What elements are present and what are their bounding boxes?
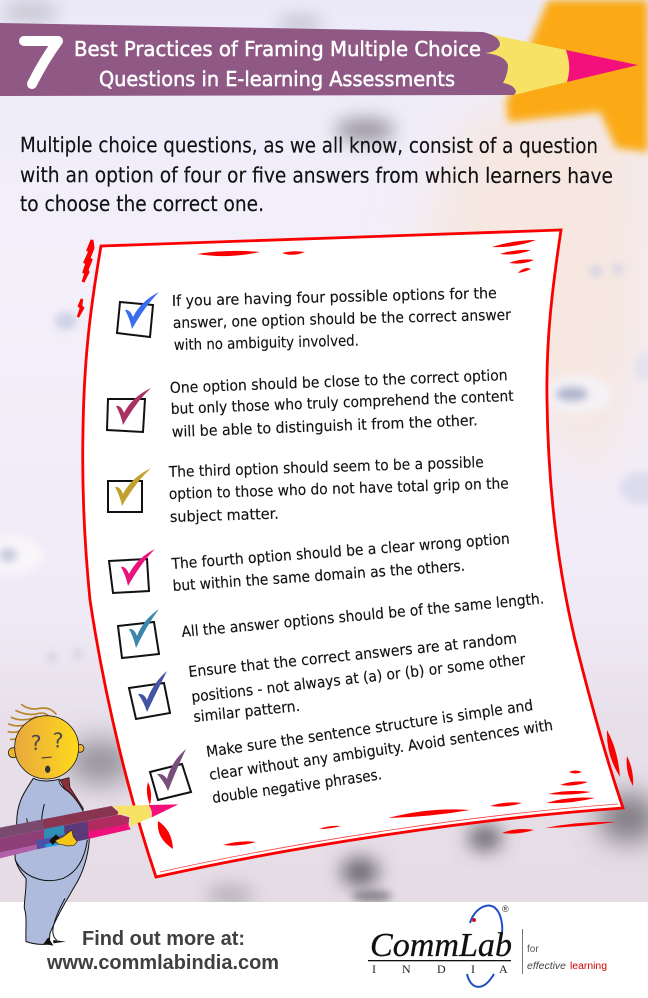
question marks: ? <box>53 728 64 752</box>
India letters: N <box>402 962 411 976</box>
wordmark rule <box>368 960 511 961</box>
item 2 <box>107 366 514 441</box>
title text: Best Practices of Framing Multiple Choice <box>74 37 481 61</box>
intro paragraph <box>20 133 613 216</box>
inner paper edge <box>160 804 618 872</box>
India letters: D <box>437 962 446 976</box>
paper sheet <box>83 230 623 877</box>
item 1 text <box>172 284 512 354</box>
tick 4 <box>121 549 155 586</box>
pencil tip: yellow wood <box>480 32 570 95</box>
item 4 text: but within the same domain as the others. <box>172 557 466 595</box>
India letters: A <box>499 962 508 976</box>
CommLab India logo <box>368 904 607 987</box>
item 2 text: One option should be close to the correct option <box>169 366 508 397</box>
India letters <box>372 962 508 976</box>
registered mark: ® <box>502 904 509 914</box>
checkbox 6 <box>129 683 170 719</box>
pencil tip: pink lead <box>566 50 638 82</box>
footer call to action: www.commlabindia.com <box>46 952 279 974</box>
wordmark: CommLab <box>370 927 512 964</box>
question marks <box>31 728 64 755</box>
tick 6 <box>138 671 167 712</box>
item 6 text: similar pattern. <box>193 697 301 726</box>
item 6 text <box>188 629 527 726</box>
red brush marks <box>78 240 633 849</box>
item 3 text: The third option should seem to be a possible <box>168 453 484 481</box>
footer band <box>0 902 648 998</box>
head <box>15 716 79 779</box>
large pencil <box>0 804 178 858</box>
item 1 text: If you are having four possible options for the <box>172 284 497 310</box>
item 7 <box>150 696 554 807</box>
checkbox 7 <box>150 764 191 800</box>
item 3 text <box>168 453 509 526</box>
tick 1 <box>125 292 159 329</box>
hair <box>8 705 56 739</box>
nose and mouth <box>42 757 52 773</box>
tick 3 <box>115 468 151 506</box>
tagline: learning <box>570 961 607 972</box>
checkbox 1 <box>117 302 153 337</box>
item 1 text: with no ambiguity involved. <box>174 331 359 354</box>
item 5 <box>118 589 545 658</box>
orbit arcs <box>467 906 502 987</box>
checkbox 5 <box>118 622 159 658</box>
tagline: effective <box>527 961 566 972</box>
tick 2 <box>116 388 151 425</box>
tie <box>60 778 83 814</box>
item 3 <box>108 453 509 526</box>
tick 7 <box>157 749 186 791</box>
intro paragraph: to choose the correct one. <box>20 192 264 216</box>
banner ribbon <box>0 23 516 96</box>
item 7 text <box>205 696 554 807</box>
footer call to action <box>46 928 279 974</box>
divider <box>522 929 523 974</box>
item 2 text: but only those who truly comprehend the content <box>170 387 514 418</box>
red dot <box>472 918 476 922</box>
hand <box>49 830 77 846</box>
item 7 text: Make sure the sentence structure is simple and <box>205 696 534 761</box>
belly and leg lines <box>15 804 87 940</box>
item 4 text <box>170 530 510 595</box>
item 4 <box>109 530 510 595</box>
India letters: I <box>471 962 475 976</box>
item 2 text: will be able to distinguish it from the other. <box>171 411 478 441</box>
ears <box>8 744 84 758</box>
tagline: for <box>527 944 539 955</box>
checkbox 3 <box>108 481 142 512</box>
item 7 text: clear without any ambiguity. Avoid sentences with <box>208 716 554 784</box>
tick 5 <box>129 609 159 648</box>
title text <box>74 37 481 91</box>
item 1 text: answer, one option should be the correct answer <box>173 306 512 332</box>
body <box>15 778 89 944</box>
item 1 <box>117 284 512 354</box>
item 3 text: subject matter. <box>170 505 279 526</box>
tagline <box>527 944 607 972</box>
checkbox 4 <box>109 559 149 593</box>
India letters: I <box>372 962 376 976</box>
character holding a pencil <box>0 705 178 946</box>
footer call to action: Find out more at: <box>82 928 245 950</box>
question marks: ? <box>31 731 42 755</box>
item 5 text: All the answer options should be of the same length. <box>181 589 545 641</box>
item 3 text: option to those who do not have total grip on the <box>169 474 509 503</box>
item 7 text: double negative phrases. <box>211 765 383 807</box>
numeral 7 <box>24 41 58 84</box>
item 6 text: Ensure that the correct answers are at random <box>188 629 518 681</box>
item 4 text: The fourth option should be a clear wrong option <box>170 530 510 573</box>
panel: paper checklist <box>78 230 633 877</box>
title banner <box>0 23 638 96</box>
checkbox 2 <box>107 399 145 432</box>
item 6 <box>129 629 527 726</box>
shoes <box>43 937 66 946</box>
item 6 text: positions - not always at (a) or (b) or some other <box>190 650 527 706</box>
title text: Questions in E-learning Assessments <box>99 67 455 91</box>
item 2 text <box>169 366 514 441</box>
